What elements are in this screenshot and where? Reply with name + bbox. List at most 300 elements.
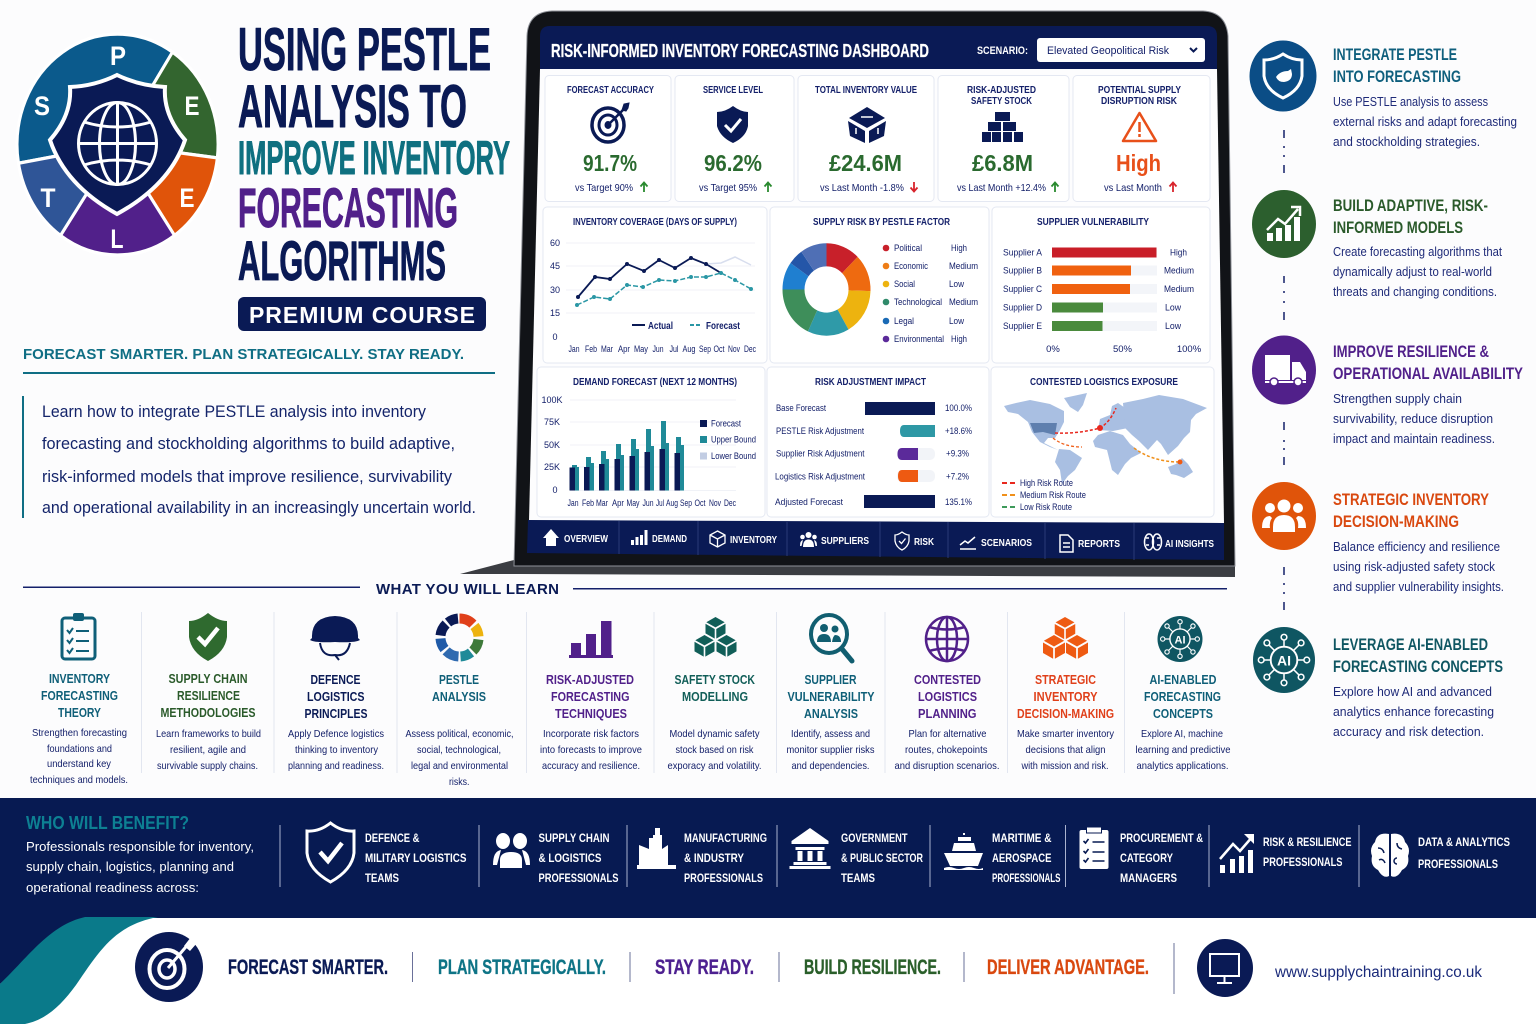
icon: orange cubes xyxy=(1043,617,1088,659)
benefit: strategic inventory decisions: using risk-adjusted safety stock xyxy=(1333,560,1496,574)
learn card: safety stock modelling: exporacy and volatility. xyxy=(668,760,762,772)
premium course badge: PREMIUM COURSE xyxy=(249,302,475,328)
learn card: inventory forecasting theory xyxy=(30,613,128,786)
learn card: strategic inventory decision-making: decisions that align xyxy=(1026,744,1106,756)
chart: demand forecast: 0 xyxy=(552,485,558,495)
learn card: supply chain resilience methodologies: SUPPLY CHAIN xyxy=(168,671,248,686)
benefit: integrate PESTLE: and stockholding strategies. xyxy=(1333,135,1480,149)
audience: government teams xyxy=(790,828,924,885)
benefit: AI-enabled concepts: analytics enhance forecasting xyxy=(1333,705,1494,719)
audience: data and analytics professionals xyxy=(1371,834,1510,877)
course description: risk-informed models that improve resilience, survivability xyxy=(42,467,452,486)
KPI: forecast accuracy: FORECAST ACCURACY xyxy=(567,84,654,96)
chart: demand forecast: Lower Bound xyxy=(711,451,756,461)
learn card: supplier vulnerability analysis: ANALYSIS xyxy=(804,706,858,721)
chart: supplier vulnerability: 0% xyxy=(1046,344,1060,355)
audience: procurement managers: MANAGERS xyxy=(1120,873,1177,885)
chart: risk adjustment impact: PESTLE Risk Adjustment xyxy=(776,426,864,437)
chart: inventory coverage: May xyxy=(634,344,648,354)
KPI: forecast accuracy xyxy=(545,76,671,202)
learn card: contested logistics planning xyxy=(894,617,1000,772)
dashboard navigation bar: AI INSIGHTS xyxy=(1165,538,1214,550)
chart: inventory coverage: Jul xyxy=(670,344,678,354)
audience: maritime professionals: PROFESSIONALS xyxy=(992,873,1061,885)
chart: supplier vulnerability: Low xyxy=(1165,302,1181,314)
chart: demand forecast: Jun xyxy=(642,498,654,508)
title: USING PESTLE xyxy=(238,16,491,83)
who will benefit intro: Professionals responsible for inventory, xyxy=(26,839,254,854)
audience: procurement managers xyxy=(1080,827,1203,885)
learn card: safety stock modelling xyxy=(668,617,762,772)
learn card: strategic inventory decision-making: with mission and risk. xyxy=(1021,760,1108,772)
chart: inventory coverage: Sep xyxy=(699,344,711,354)
learn card: supplier vulnerability analysis: monitor supplier risks xyxy=(786,744,874,756)
chart: demand forecast: Nov xyxy=(709,498,721,508)
chart: risk adjustment impact xyxy=(767,367,989,517)
learn card: contested logistics planning: LOGISTICS xyxy=(918,689,977,704)
who will benefit intro: WHO WILL BENEFIT? xyxy=(26,812,189,833)
chart: risk adjustment impact: Base Forecast xyxy=(776,403,826,414)
chart: contested logistics exposure map: High Risk Route xyxy=(1020,478,1073,488)
chart: supply risk by PESTLE factor: High xyxy=(951,243,967,253)
footer slogans: BUILD RESILIENCE. xyxy=(804,955,941,979)
course description xyxy=(22,396,476,518)
icon: teal cubes xyxy=(694,617,736,657)
audience: defence teams: MILITARY LOGISTICS xyxy=(365,853,467,865)
icon: shield circle xyxy=(1250,40,1316,112)
chart: risk adjustment impact: +18.6% xyxy=(945,426,972,437)
audience: procurement managers: PROCUREMENT & xyxy=(1120,833,1203,845)
chart: supply risk by PESTLE factor: Economic xyxy=(894,261,928,271)
audience: manufacturing professionals: & INDUSTRY xyxy=(684,853,744,865)
learn card: supplier vulnerability analysis: VULNERABILITY xyxy=(788,689,875,704)
chart: demand forecast: Dec xyxy=(724,498,736,508)
chart: supply risk by PESTLE factor: Technological xyxy=(894,297,942,307)
learn card: supply chain resilience methodologies: survivable supply chains. xyxy=(157,760,258,772)
who will benefit intro xyxy=(26,812,254,895)
learn card: safety stock modelling: Model dynamic safety xyxy=(670,728,760,740)
benefit: integrate PESTLE: INTO FORECASTING xyxy=(1333,67,1461,86)
icon: magnifier with people xyxy=(811,615,852,661)
PESTLE logo wheel: S xyxy=(34,91,50,121)
course description: Learn how to integrate PESTLE analysis into inventory xyxy=(42,402,426,421)
learn card: strategic inventory decision-making: DECISION-MAKING xyxy=(1017,706,1114,721)
chart: supply risk by PESTLE factor: Legal xyxy=(894,316,914,326)
learn card: contested logistics planning: routes, chokepoints xyxy=(905,744,988,756)
audience: data and analytics professionals: DATA & ANALYTICS xyxy=(1418,837,1510,849)
dashboard navigation bar: SCENARIOS xyxy=(981,537,1032,549)
chart: inventory coverage: 30 xyxy=(550,285,560,295)
chart: demand forecast: Upper Bound xyxy=(711,434,756,444)
learn card: supplier vulnerability analysis: and dependencies. xyxy=(792,760,870,772)
chart: inventory coverage: Apr xyxy=(618,344,630,354)
chart: inventory coverage: 15 xyxy=(550,308,560,318)
chart: risk adjustment impact: 135.1% xyxy=(945,497,972,508)
chart: risk adjustment impact: +7.2% xyxy=(946,472,969,482)
learn card: defence logistics principles: planning and readiness. xyxy=(288,760,384,772)
course description: forecasting and stockholding algorithms to build adaptive, xyxy=(42,434,455,453)
chart: inventory coverage: Aug xyxy=(682,344,696,354)
learn card: inventory forecasting theory: Strengthen forecasting xyxy=(32,727,127,739)
PESTLE logo wheel: E xyxy=(180,183,194,213)
chart: demand forecast: 75K xyxy=(544,417,560,427)
icon: AI circle: AI xyxy=(1277,652,1291,668)
chart: demand forecast: Sep xyxy=(680,498,692,508)
chart: demand forecast xyxy=(537,367,765,517)
chart: inventory coverage: Jun xyxy=(652,344,664,354)
KPI: service level: 96.2% xyxy=(704,150,762,176)
chart: contested logistics exposure map xyxy=(991,367,1214,517)
learn card: supplier vulnerability analysis xyxy=(786,615,875,772)
learn card: inventory forecasting theory: THEORY xyxy=(58,705,101,720)
chart: inventory coverage: Actual xyxy=(648,321,673,332)
chart: demand forecast: May xyxy=(626,498,640,508)
learn card: AI-enabled forecasting concepts: FORECASTING xyxy=(1144,689,1221,704)
learn card: risk-adjusted forecasting techniques: FORECASTING xyxy=(551,689,630,704)
learn card: AI-enabled forecasting concepts: analytics applications. xyxy=(1136,760,1228,772)
dashboard navigation bar: SUPPLIERS xyxy=(821,535,869,547)
footer swoosh xyxy=(0,917,1536,1024)
benefit: AI-enabled concepts: LEVERAGE AI-ENABLED xyxy=(1333,635,1488,654)
premium course badge xyxy=(238,297,486,331)
KPI: risk-adjusted safety stock xyxy=(938,76,1069,202)
chart: supply risk by PESTLE factor: SUPPLY RISK BY PESTLE FACTOR xyxy=(813,217,951,228)
learn card: defence logistics principles: PRINCIPLES xyxy=(304,706,368,721)
benefit: strategic inventory decisions: DECISION-MAKING xyxy=(1333,512,1459,531)
chart: supply risk by PESTLE factor: Political xyxy=(894,243,922,253)
chart: inventory coverage: Jan xyxy=(568,344,580,354)
benefit: strategic inventory decisions: and supplier vulnerability insights. xyxy=(1333,580,1504,594)
footer slogans: STAY READY. xyxy=(655,955,754,979)
chart: risk adjustment impact: Supplier Risk Adjustment xyxy=(776,448,865,460)
icon: segmented ring xyxy=(440,618,478,656)
PESTLE logo wheel xyxy=(17,34,218,255)
audience: supply chain professionals: SUPPLY CHAIN xyxy=(538,833,610,845)
chart: inventory coverage: Nov xyxy=(728,344,740,354)
dashboard navigation bar: DEMAND xyxy=(652,533,687,545)
chart: risk adjustment impact: RISK ADJUSTMENT IMPACT xyxy=(815,377,926,388)
dashboard navigation bar: OVERVIEW xyxy=(564,533,608,545)
learn card: PESTLE analysis: legal and environmental xyxy=(411,760,508,772)
learn card: defence logistics principles: thinking to inventory xyxy=(295,744,379,756)
audience: government teams: GOVERNMENT xyxy=(841,833,908,845)
icon: truck circle xyxy=(1252,336,1316,404)
audience: government teams: TEAMS xyxy=(841,873,875,885)
KPI: risk-adjusted safety stock: vs Last Month +12.4% xyxy=(957,182,1046,194)
chart: demand forecast: Mar xyxy=(596,498,608,508)
learn card: AI-enabled forecasting concepts: AI-ENABLED xyxy=(1150,672,1216,687)
chart: risk adjustment impact: +9.3% xyxy=(946,448,969,460)
chart: risk adjustment impact: 100.0% xyxy=(945,403,972,414)
title xyxy=(238,16,510,292)
learn card: safety stock modelling: SAFETY STOCK xyxy=(674,672,755,687)
website link xyxy=(1197,939,1482,997)
footer slogans xyxy=(228,955,1149,979)
chart: supplier vulnerability: Supplier C xyxy=(1003,284,1042,295)
learn card: safety stock modelling: stock based on risk xyxy=(676,744,754,756)
benefit: build adaptive models: Create forecasting algorithms that xyxy=(1333,245,1502,259)
learn card: defence logistics principles: Apply Defence logistics xyxy=(288,728,384,740)
audience: risk and resilience professionals xyxy=(1220,834,1352,873)
benefit: strategic inventory decisions: Balance efficiency and resilience xyxy=(1333,540,1500,554)
audience: supply chain professionals: & LOGISTICS xyxy=(538,853,602,865)
learn card: supplier vulnerability analysis: SUPPLIER xyxy=(804,672,857,687)
chart: supplier vulnerability: Supplier D xyxy=(1003,302,1042,314)
learn card: supply chain resilience methodologies: RESILIENCE xyxy=(177,688,240,703)
audience: manufacturing professionals: MANUFACTURING xyxy=(684,833,767,845)
tagline: FORECAST SMARTER. PLAN STRATEGICALLY. STAY READY. xyxy=(23,346,464,363)
KPI: risk-adjusted safety stock: £6.8M xyxy=(972,150,1033,176)
title: ANALYSIS TO xyxy=(238,73,467,140)
dashboard navigation bar xyxy=(527,520,1224,560)
learn card: contested logistics planning: and disruption scenarios. xyxy=(894,760,1000,772)
chart: demand forecast: Forecast xyxy=(711,418,741,428)
learn card: supply chain resilience methodologies xyxy=(156,613,261,772)
chart: supply risk by PESTLE factor: Medium xyxy=(949,261,978,271)
learn card: inventory forecasting theory: techniques and models. xyxy=(30,774,128,786)
learn card: PESTLE analysis: social, technological, xyxy=(417,744,501,756)
learn card: risk-adjusted forecasting techniques: into forecasts to improve xyxy=(540,744,642,756)
audience: government teams: & PUBLIC SECTOR xyxy=(841,853,924,865)
learn card: contested logistics planning: Plan for alternative xyxy=(908,728,987,740)
learn card: inventory forecasting theory: FORECASTING xyxy=(41,688,118,703)
learn card: inventory forecasting theory: foundations and xyxy=(47,743,112,755)
title: IMPROVE INVENTORY xyxy=(238,131,510,184)
benefit: build adaptive models xyxy=(1252,190,1502,299)
title: FORECASTING xyxy=(238,176,458,239)
chart: supply risk by PESTLE factor: Low xyxy=(949,279,964,289)
learn card: supply chain resilience methodologies: METHODOLOGIES xyxy=(160,705,256,720)
learn card: defence logistics principles xyxy=(288,616,384,772)
audience: supply chain professionals: PROFESSIONALS xyxy=(538,873,619,885)
dashboard header: SCENARIO: xyxy=(977,45,1028,57)
icon: shield check xyxy=(189,613,227,661)
benefit: build adaptive models: threats and changing conditions. xyxy=(1333,285,1497,299)
dashboard header: RISK-INFORMED INVENTORY FORECASTING DASHBOARD xyxy=(551,41,929,61)
audience: maritime professionals: MARITIME & xyxy=(992,833,1052,845)
chart: supplier vulnerability: 100% xyxy=(1177,344,1202,355)
footer slogans: DELIVER ADVANTAGE. xyxy=(987,955,1149,979)
course description: and operational availability in an increasingly uncertain world. xyxy=(42,498,476,517)
learn card: strategic inventory decision-making: STRATEGIC xyxy=(1035,672,1096,687)
PESTLE logo wheel: P xyxy=(110,41,126,71)
icon: helmet xyxy=(310,616,360,660)
learn card: AI-enabled forecasting concepts: Explore AI, machine xyxy=(1141,728,1223,740)
icon: AI circle xyxy=(1158,616,1202,662)
chart: demand forecast: Oct xyxy=(694,498,706,508)
chart: supplier vulnerability: Supplier B xyxy=(1003,266,1042,276)
learn card: risk-adjusted forecasting techniques: Incorporate risk factors xyxy=(543,728,639,740)
KPI: potential supply disruption risk: POTENTIAL SUPPLY xyxy=(1098,84,1181,96)
learn card: strategic inventory decision-making xyxy=(1017,617,1115,772)
chart: demand forecast: Jan xyxy=(568,498,578,508)
learn card: inventory forecasting theory: INVENTORY xyxy=(49,671,110,686)
icon: footer target xyxy=(135,932,203,1002)
audience: risk and resilience professionals: RISK & RESILIENCE xyxy=(1263,837,1352,849)
chart: supplier vulnerability: Medium xyxy=(1164,266,1194,276)
benefit: integrate PESTLE: external risks and adapt forecasting xyxy=(1333,115,1517,129)
benefit: AI-enabled concepts xyxy=(1253,627,1503,739)
title: ALGORITHMS xyxy=(238,229,446,292)
benefit: improve resilience: Strengthen supply chain xyxy=(1333,392,1462,406)
learn card: PESTLE analysis: PESTLE xyxy=(439,672,479,687)
dashboard navigation bar: REPORTS xyxy=(1078,538,1120,550)
chart: risk adjustment impact: Adjusted Forecast xyxy=(775,497,843,508)
laptop frame xyxy=(460,11,1235,577)
benefit: build adaptive models: INFORMED MODELS xyxy=(1333,218,1463,237)
icon: AI circle xyxy=(1253,627,1315,693)
audience: maritime professionals xyxy=(944,833,1061,885)
KPI: service level: vs Target 95% xyxy=(699,182,757,194)
KPI: risk-adjusted safety stock: RISK-ADJUSTED xyxy=(967,84,1036,96)
dashboard navigation bar: RISK xyxy=(914,536,934,548)
dashboard navigation bar: INVENTORY xyxy=(730,534,777,546)
chart: demand forecast: Feb xyxy=(582,498,594,508)
KPI: total inventory value: £24.6M xyxy=(829,150,902,176)
KPI: total inventory value: vs Last Month -1.8% xyxy=(820,182,904,194)
icon: people circle xyxy=(1252,482,1316,550)
learn card: PESTLE analysis: Assess political, economic, xyxy=(406,728,514,740)
audience: manufacturing professionals: PROFESSIONALS xyxy=(684,873,763,885)
KPI: forecast accuracy: 91.7% xyxy=(583,150,637,176)
KPI: potential supply disruption risk: DISRUPTION RISK xyxy=(1101,95,1177,107)
audience: supply chain professionals xyxy=(493,833,619,885)
chart: demand forecast: DEMAND FORECAST (NEXT 12 MONTHS) xyxy=(573,377,737,388)
chart: demand forecast: 100K xyxy=(541,395,563,405)
learn card: supply chain resilience methodologies: Learn frameworks to build xyxy=(156,728,261,740)
chart: inventory coverage xyxy=(543,207,767,363)
chart: inventory coverage: 60 xyxy=(550,238,560,248)
PESTLE logo wheel: E xyxy=(184,91,200,121)
learn card: AI-enabled forecasting concepts: learning and predictive xyxy=(1136,744,1231,756)
audience: risk and resilience professionals: PROFESSIONALS xyxy=(1263,857,1343,869)
learn card: inventory forecasting theory: understand key xyxy=(47,758,112,770)
icon: AI circle: AI xyxy=(1174,634,1186,646)
benefit: build adaptive models: BUILD ADAPTIVE, RISK- xyxy=(1333,196,1488,215)
KPI: risk-adjusted safety stock: SAFETY STOCK xyxy=(971,95,1032,107)
audience: defence teams xyxy=(307,823,467,885)
benefit: strategic inventory decisions: STRATEGIC INVENTORY xyxy=(1333,490,1490,509)
learn card: AI-enabled forecasting concepts: CONCEPTS xyxy=(1153,706,1213,721)
dashboard header xyxy=(540,26,1217,69)
benefit: AI-enabled concepts: Explore how AI and advanced xyxy=(1333,685,1492,699)
icon: purple globe xyxy=(926,617,968,661)
chart: inventory coverage: Feb xyxy=(585,344,597,354)
audience: defence teams: DEFENCE & xyxy=(365,833,420,845)
chart: inventory coverage: Oct xyxy=(714,344,725,354)
chart: supplier vulnerability xyxy=(992,207,1210,363)
chart: inventory coverage: Dec xyxy=(744,344,756,354)
learn card: risk-adjusted forecasting techniques: RISK-ADJUSTED xyxy=(546,672,634,687)
learn card: risk-adjusted forecasting techniques xyxy=(540,621,642,772)
learn card: defence logistics principles: DEFENCE xyxy=(310,672,361,687)
chart: inventory coverage: INVENTORY COVERAGE (DAYS OF SUPPLY) xyxy=(573,217,737,228)
benefit: improve resilience: IMPROVE RESILIENCE & xyxy=(1333,342,1489,361)
benefit: improve resilience: survivability, reduce disruption xyxy=(1333,412,1493,426)
chart: supplier vulnerability: 50% xyxy=(1113,344,1133,355)
chart: inventory coverage: 45 xyxy=(550,261,560,271)
benefit: integrate PESTLE: Use PESTLE analysis to assess xyxy=(1333,95,1488,109)
KPI: potential supply disruption risk: vs Last Month xyxy=(1104,182,1162,194)
footer slogans: FORECAST SMARTER. xyxy=(228,955,388,979)
chart: demand forecast: 50K xyxy=(544,440,560,450)
chart: contested logistics exposure map: Low Risk Route xyxy=(1020,502,1072,512)
benefit: AI-enabled concepts: accuracy and risk detection. xyxy=(1333,725,1484,739)
dashboard header: Elevated Geopolitical Risk xyxy=(1047,45,1169,57)
learn card: PESTLE analysis: risks. xyxy=(449,776,470,788)
learn card: risk-adjusted forecasting techniques: TECHNIQUES xyxy=(555,706,627,721)
chart: supplier vulnerability: Medium xyxy=(1164,284,1194,295)
chart: supplier vulnerability: High xyxy=(1170,248,1187,258)
chart: supply risk by PESTLE factor: Medium xyxy=(949,297,978,307)
learn card: contested logistics planning: PLANNING xyxy=(918,706,976,721)
benefit: improve resilience: impact and maintain readiness. xyxy=(1333,432,1495,446)
audience: procurement managers: CATEGORY xyxy=(1120,853,1173,865)
chart: supplier vulnerability: SUPPLIER VULNERABILITY xyxy=(1037,217,1149,228)
learn card: supplier vulnerability analysis: Identify, assess and xyxy=(791,728,870,740)
KPI: total inventory value: TOTAL INVENTORY VALUE xyxy=(815,84,917,96)
KPI: service level: SERVICE LEVEL xyxy=(703,84,763,96)
who will benefit intro: operational readiness across: xyxy=(26,880,199,895)
PESTLE logo wheel: L xyxy=(110,224,124,254)
who will benefit intro: supply chain, logistics, planning and xyxy=(26,859,234,874)
icon: clipboard xyxy=(62,613,95,659)
benefit: improve resilience xyxy=(1252,336,1524,446)
section heading: what you will learn: WHAT YOU WILL LEARN xyxy=(376,581,559,598)
learn card: supply chain resilience methodologies: resilient, agile and xyxy=(170,744,246,756)
learn card: strategic inventory decision-making: Make smarter inventory xyxy=(1017,728,1115,740)
audience: data and analytics professionals: PROFESSIONALS xyxy=(1418,859,1498,871)
learn card: PESTLE analysis: ANALYSIS xyxy=(432,689,486,704)
learn card: PESTLE analysis xyxy=(406,618,514,788)
chart: demand forecast: Apr xyxy=(612,498,624,508)
learn card: defence logistics principles: LOGISTICS xyxy=(307,689,365,704)
PESTLE logo wheel: T xyxy=(40,183,56,213)
audience: manufacturing professionals xyxy=(637,828,767,885)
benefit: build adaptive models: dynamically adjust to real-world xyxy=(1333,265,1492,279)
chart: supply risk by PESTLE factor: Low xyxy=(949,316,964,326)
footer slogans: PLAN STRATEGICALLY. xyxy=(438,955,606,979)
website link: www.supplychaintraining.co.uk xyxy=(1274,964,1482,981)
KPI: service level xyxy=(675,76,794,202)
who will benefit band xyxy=(0,798,1536,918)
learn card: strategic inventory decision-making: INVENTORY xyxy=(1034,689,1098,704)
chart: inventory coverage: Forecast xyxy=(706,321,741,332)
benefit: integrate PESTLE xyxy=(1250,40,1517,149)
chart: contested logistics exposure map: CONTESTED LOGISTICS EXPOSURE xyxy=(1030,377,1178,388)
chart: supply risk by PESTLE factor: Environmental xyxy=(894,334,944,344)
chart: supplier vulnerability: Supplier E xyxy=(1003,321,1042,332)
benefit: strategic inventory decisions xyxy=(1252,482,1504,594)
chart: supply risk by PESTLE factor: Social xyxy=(894,279,915,289)
audience: maritime professionals: AEROSPACE xyxy=(992,853,1052,865)
KPI: potential supply disruption risk xyxy=(1073,76,1210,202)
chart: inventory coverage: Mar xyxy=(601,344,613,354)
chart: demand forecast: 25K xyxy=(544,462,560,472)
chart: supplier vulnerability: Supplier A xyxy=(1003,248,1043,258)
icon: bar chart xyxy=(569,621,613,658)
KPI: potential supply disruption risk: High xyxy=(1116,150,1161,176)
audience: defence teams: TEAMS xyxy=(365,873,399,885)
chart: supply risk by PESTLE factor: High xyxy=(951,334,967,344)
chart: inventory coverage: 0 xyxy=(552,332,558,342)
icon: growth chart circle xyxy=(1252,190,1316,258)
chart: contested logistics exposure map: Medium Risk Route xyxy=(1020,490,1086,500)
chart: demand forecast: Aug xyxy=(666,498,678,508)
learn card: contested logistics planning: CONTESTED xyxy=(914,672,981,687)
KPI: forecast accuracy: vs Target 90% xyxy=(575,182,633,194)
chart: risk adjustment impact: Logistics Risk Adjustment xyxy=(775,472,865,482)
